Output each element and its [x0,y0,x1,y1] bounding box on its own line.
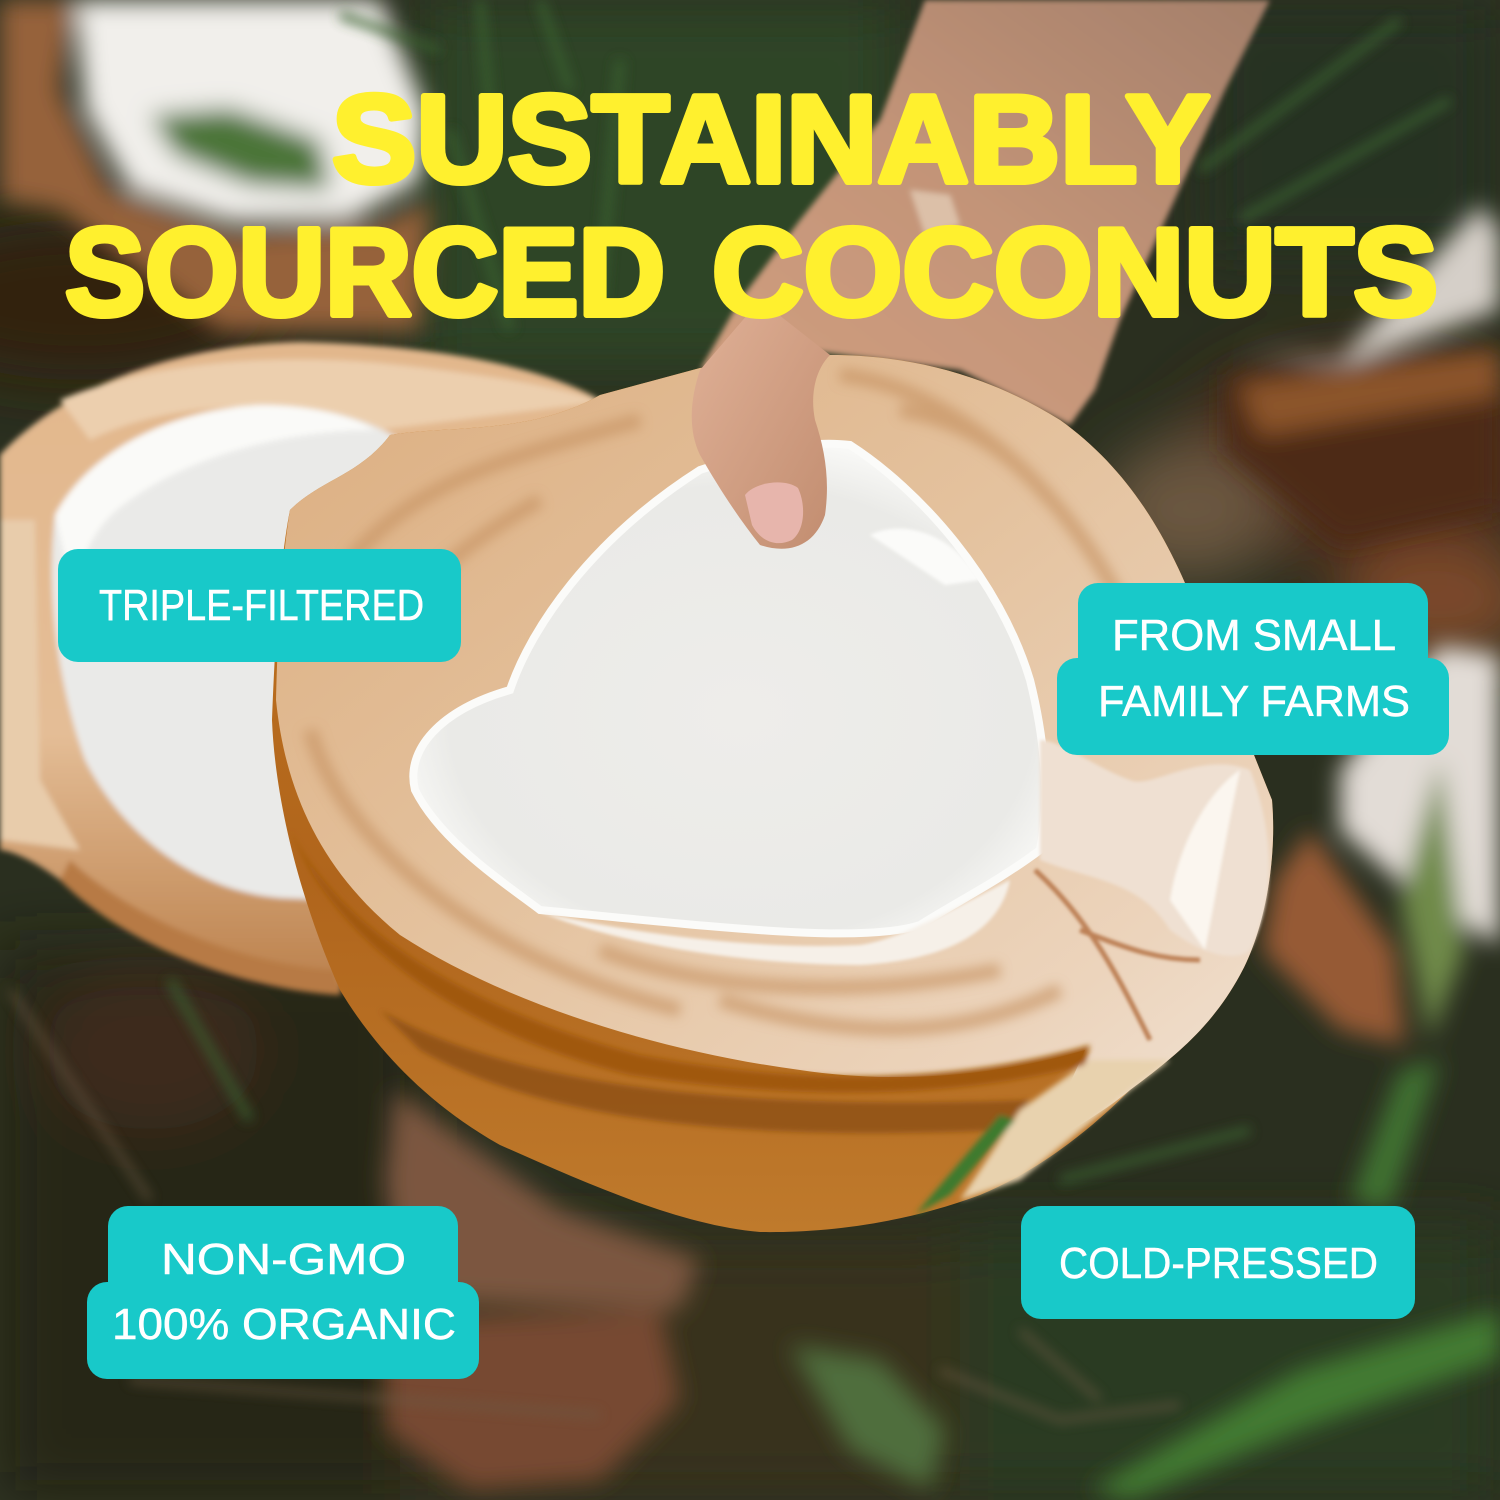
coconut meat interior [413,444,1045,933]
badge: non-gmo 100% organic: NON-GMO [161,1235,406,1284]
cream rim [276,355,1273,1150]
blurred top-left coconut [0,0,430,330]
fibrous husk detail [540,529,1269,1040]
badge: triple-filtered [58,549,461,662]
rim tan streaks [310,375,1120,1029]
badge: non-gmo 100% organic: 100% ORGANIC [112,1300,456,1349]
thumb [692,300,830,549]
badge: non-gmo 100% organic [87,1206,479,1379]
left coconut half [0,342,600,995]
badge: triple-filtered: TRIPLE-FILTERED [99,581,424,630]
hand and wrist [700,0,1270,425]
main coconut [272,355,1273,1232]
badge: from small family farms [1057,583,1449,755]
title: COCONUTS [712,204,1438,342]
shell banding [290,830,1170,1215]
badge: from small family farms: FAMILY FARMS [1098,677,1410,726]
title: SUSTAINABLY [332,71,1210,209]
badge: cold-pressed: COLD-PRESSED [1059,1239,1378,1288]
coconut shell [272,355,1273,1232]
badge: from small family farms: FROM SMALL [1112,611,1396,660]
title [65,71,1438,342]
thumbnail [745,482,803,543]
badge: cold-pressed [1021,1206,1415,1319]
title: SOURCED [65,204,665,342]
